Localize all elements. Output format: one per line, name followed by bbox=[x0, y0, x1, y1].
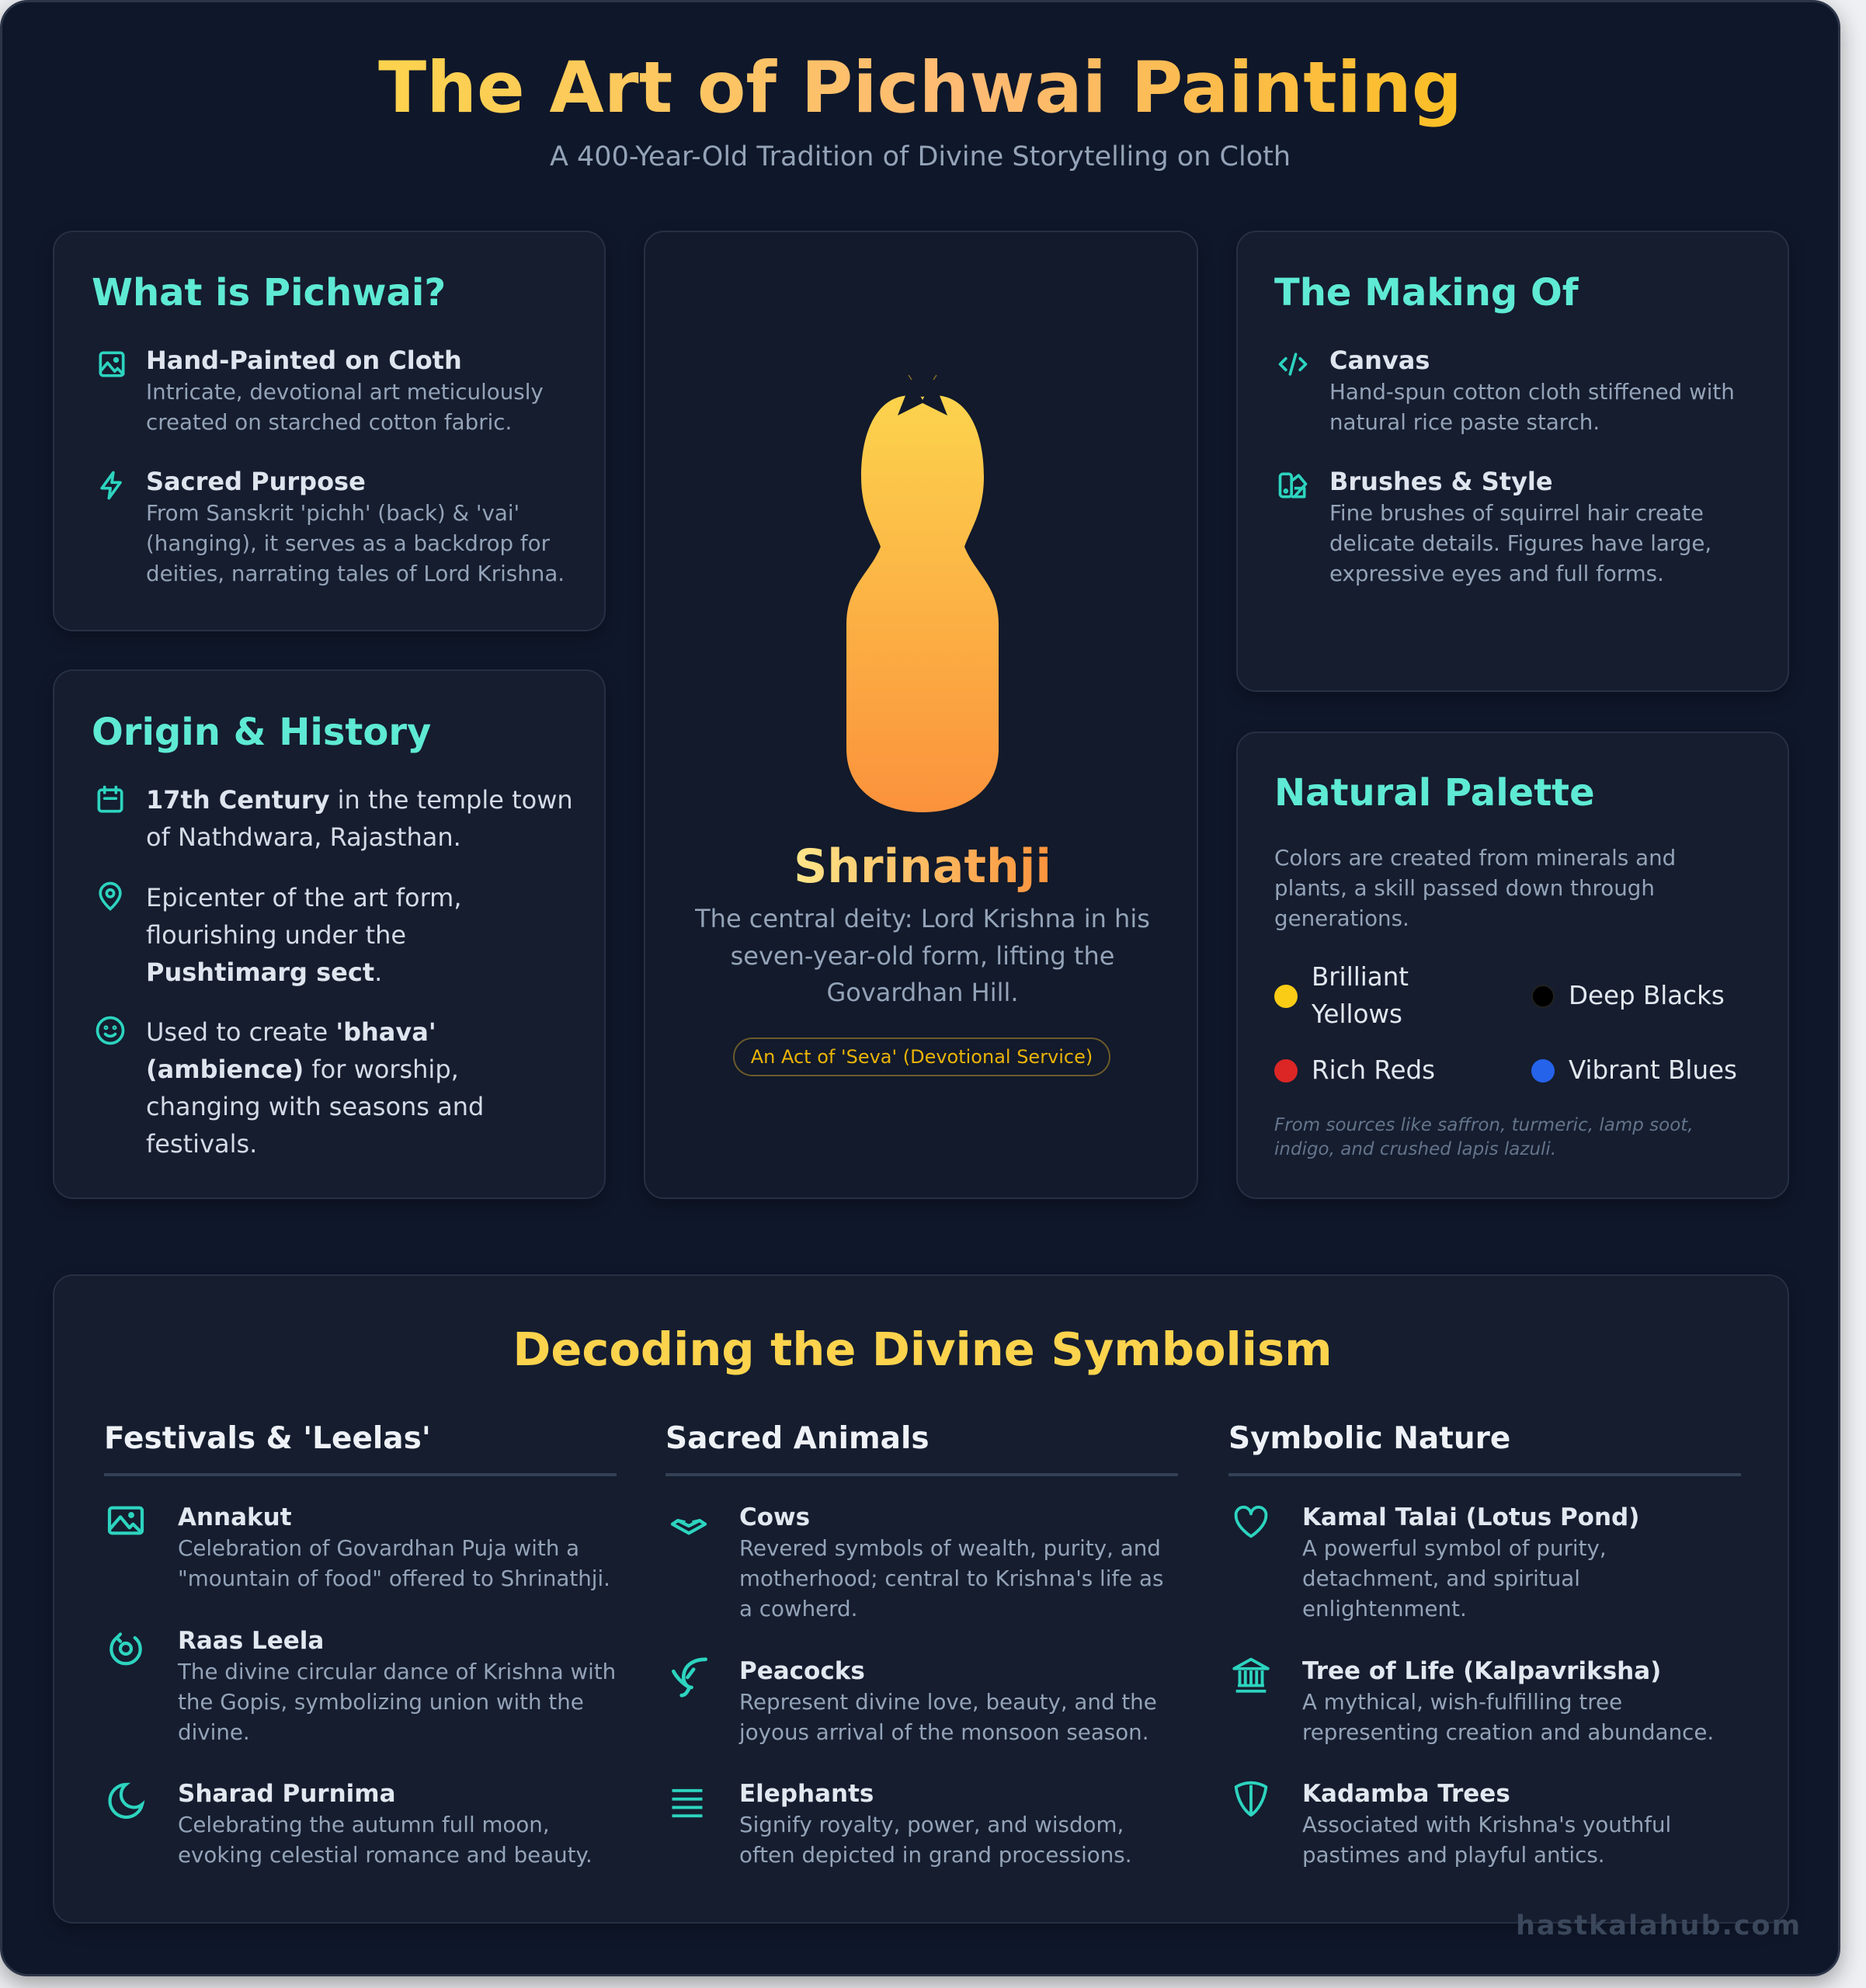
text: description: The central deity: Lord Krishna in his bbox=[695, 904, 1150, 933]
item: peacocks bbox=[739, 1657, 1157, 1745]
text: description: seven-year-old form, lifting the bbox=[731, 941, 1114, 971]
item: kamal talai: detachment, and spiritual bbox=[1302, 1566, 1580, 1591]
subtitle: A 400-Year-Old Tradition of Divine Storytelling on Cloth bbox=[550, 141, 1291, 172]
item: kamal talai: A powerful symbol of purity, bbox=[1302, 1535, 1607, 1561]
text: palette description: plants, a skill passed down through bbox=[1274, 875, 1655, 901]
panel: symbolism bbox=[53, 1274, 1789, 1924]
swatch: yellow bbox=[1274, 962, 1409, 1029]
item: peacocks: Represent divine love, beauty, and the bbox=[739, 1689, 1157, 1715]
icon: code bbox=[1278, 353, 1308, 376]
item: annakut: "mountain of food" offered to Shrinathji. bbox=[178, 1566, 610, 1591]
item: hand-painted: Intricate, devotional art meticulously bbox=[146, 379, 544, 405]
swatch: yellow: Yellows bbox=[1312, 999, 1402, 1029]
item: sharad bbox=[178, 1780, 592, 1868]
item: sharad: evoking celestial romance and beauty. bbox=[178, 1842, 592, 1868]
text: bhava: festivals. bbox=[146, 1129, 257, 1159]
text: bhava bbox=[146, 1017, 484, 1159]
text: 17th century: 17th Century in the temple town bbox=[146, 785, 573, 815]
item: elephants: Signify royalty, power, and wisdom, bbox=[739, 1812, 1124, 1837]
item: kamal talai: Kamal Talai (Lotus Pond) bbox=[1302, 1503, 1639, 1531]
icon: image bbox=[107, 1507, 144, 1534]
text: bhava: (ambience) for worship, bbox=[146, 1055, 459, 1084]
item: peacocks: Peacocks bbox=[739, 1657, 865, 1685]
text: epicenter: flourishing under the bbox=[146, 920, 406, 950]
icon: moon bbox=[108, 1783, 144, 1819]
item: raas leela: divine. bbox=[178, 1719, 250, 1745]
item: kadamba: Associated with Krishna's youthful bbox=[1302, 1812, 1671, 1837]
item: elephants bbox=[739, 1780, 1132, 1868]
item: sacred purpose: deities, narrating tales of Lord Krishna. bbox=[146, 561, 565, 586]
icon: swatch bbox=[1278, 472, 1308, 499]
item: brushes: Fine brushes of squirrel hair create bbox=[1329, 500, 1704, 526]
icon: heart bbox=[1235, 1505, 1267, 1538]
item: tree of life bbox=[1302, 1656, 1714, 1747]
icon: bolt bbox=[100, 471, 122, 500]
item: cows: motherhood; central to Krishna's life as bbox=[739, 1566, 1163, 1591]
item: canvas: natural rice paste starch. bbox=[1329, 409, 1600, 435]
text: 17th century: of Nathdwara, Rajasthan. bbox=[146, 822, 461, 852]
column: festivals bbox=[104, 1421, 617, 1868]
text: palette description: Colors are created from minerals and bbox=[1274, 845, 1676, 871]
pill: seva: An Act of 'Seva' (Devotional Service) bbox=[751, 1046, 1093, 1068]
item: brushes: Brushes & Style bbox=[1329, 467, 1553, 496]
item: canvas: Canvas bbox=[1329, 346, 1430, 375]
text: description bbox=[695, 904, 1150, 1007]
item: annakut bbox=[178, 1503, 610, 1591]
panel: natural palette bbox=[1236, 732, 1789, 1199]
swatch: red: Rich Reds bbox=[1312, 1055, 1435, 1085]
item: raas leela: the Gopis, symbolizing union with the bbox=[178, 1689, 584, 1715]
item: raas leela: The divine circular dance of Krishna with bbox=[178, 1659, 616, 1684]
item: cows: Revered symbols of wealth, purity, and bbox=[739, 1535, 1161, 1561]
item: kamal talai: enlightenment. bbox=[1302, 1596, 1467, 1621]
icon: shield bbox=[1228, 1778, 1274, 1823]
column heading: festivals: Festivals & 'Leelas' bbox=[104, 1421, 431, 1456]
icon: pin bbox=[99, 882, 122, 911]
item: brushes bbox=[1329, 467, 1711, 586]
item: annakut: Celebration of Govardhan Puja with a bbox=[178, 1535, 579, 1561]
heading: symbolism: Decoding the Divine Symbolism bbox=[513, 1322, 1333, 1376]
panel: the making of bbox=[1236, 231, 1789, 692]
swatch: blue: Vibrant Blues bbox=[1569, 1055, 1737, 1085]
panel: what is pichwai bbox=[53, 231, 606, 631]
item: brushes: expressive eyes and full forms. bbox=[1329, 561, 1664, 586]
item: hand-painted bbox=[146, 346, 544, 435]
icon: temple bbox=[1228, 1652, 1274, 1697]
watermark: hastkalahub.com bbox=[1516, 1910, 1802, 1941]
item: tree of life: A mythical, wish-fulfilling tree bbox=[1302, 1689, 1622, 1715]
text: palette description: generations. bbox=[1274, 905, 1409, 931]
note: sources: indigo, and crushed lapis lazuli. bbox=[1274, 1139, 1556, 1159]
title: The Art of Pichwai Painting bbox=[378, 47, 1462, 129]
item: tree of life: representing creation and abundance. bbox=[1302, 1719, 1714, 1745]
column heading: animals: Sacred Animals bbox=[665, 1421, 930, 1456]
item: raas leela: Raas Leela bbox=[178, 1627, 324, 1655]
item: canvas bbox=[1329, 346, 1735, 435]
text: 17th century bbox=[146, 785, 573, 852]
item: sacred purpose: From Sanskrit 'pichh' (back) & 'vai' bbox=[146, 500, 519, 526]
item: cows bbox=[739, 1503, 1163, 1621]
text: palette description bbox=[1274, 845, 1676, 931]
icon: raas bbox=[109, 1632, 142, 1665]
item: hand-painted: created on starched cotton fabric. bbox=[146, 409, 512, 435]
item: sacred purpose: (hanging), it serves as a backdrop for bbox=[146, 530, 550, 556]
item: cows: Cows bbox=[739, 1503, 810, 1531]
column: animals bbox=[665, 1421, 1178, 1868]
panel: origin & history bbox=[53, 669, 606, 1199]
text: description: Govardhan Hill. bbox=[826, 978, 1019, 1007]
note: sources: From sources like saffron, turmeric, lamp soot, bbox=[1274, 1115, 1694, 1135]
figure: shrinathji silhouette bbox=[846, 374, 999, 812]
icon: smile bbox=[96, 1016, 124, 1045]
item: tree of life: Tree of Life (Kalpavriksha) bbox=[1302, 1657, 1661, 1685]
pill: seva bbox=[733, 1037, 1110, 1076]
item: sacred purpose: Sacred Purpose bbox=[146, 467, 366, 496]
icon: image bbox=[99, 351, 125, 377]
item: hand-painted: Hand-Painted on Cloth bbox=[146, 346, 462, 375]
text: epicenter: Epicenter of the art form, bbox=[146, 883, 462, 912]
item: brushes: delicate details. Figures have large, bbox=[1329, 530, 1711, 556]
item: cows: a cowherd. bbox=[739, 1596, 857, 1621]
item: kadamba bbox=[1302, 1778, 1671, 1870]
heading: origin: Origin & History bbox=[92, 711, 431, 754]
text: bhava: Used to create 'bhava' bbox=[146, 1017, 436, 1047]
swatch: yellow: Brilliant bbox=[1312, 962, 1409, 992]
column heading: nature: Symbolic Nature bbox=[1228, 1421, 1510, 1456]
icon: lines bbox=[672, 1789, 702, 1817]
column: nature bbox=[1228, 1421, 1741, 1868]
text: epicenter bbox=[146, 883, 462, 987]
panel: shrinathji center bbox=[644, 231, 1198, 1199]
note: sources bbox=[1274, 1115, 1694, 1159]
swatch: black: Deep Blacks bbox=[1569, 981, 1725, 1010]
item: canvas: Hand-spun cotton cloth stiffened with bbox=[1329, 379, 1735, 405]
item: raas leela bbox=[177, 1627, 616, 1745]
item: kadamba: Kadamba Trees bbox=[1302, 1780, 1510, 1808]
item: elephants: Elephants bbox=[739, 1780, 874, 1808]
item: kadamba: pastimes and playful antics. bbox=[1302, 1842, 1605, 1868]
item: sharad: Sharad Purnima bbox=[178, 1780, 396, 1808]
item: kamal talai bbox=[1302, 1502, 1639, 1624]
icon: cow bbox=[671, 1519, 707, 1534]
item: elephants: often depicted in grand processions. bbox=[739, 1842, 1132, 1868]
icon: calendar bbox=[98, 786, 123, 812]
heading: palette: Natural Palette bbox=[1274, 771, 1595, 815]
heading: what is pichwai: What is Pichwai? bbox=[92, 271, 446, 315]
heading: making of: The Making Of bbox=[1274, 271, 1579, 315]
icon: peacock bbox=[672, 1657, 707, 1698]
item: sacred purpose bbox=[146, 467, 565, 586]
text: epicenter: Pushtimarg sect. bbox=[146, 958, 382, 987]
item: annakut: Annakut bbox=[178, 1503, 292, 1531]
item: peacocks: joyous arrival of the monsoon season. bbox=[739, 1719, 1149, 1745]
text: bhava: changing with seasons and bbox=[146, 1092, 484, 1121]
item: sharad: Celebrating the autumn full moon, bbox=[178, 1812, 550, 1837]
heading: shrinathji: Shrinathji bbox=[794, 839, 1051, 894]
